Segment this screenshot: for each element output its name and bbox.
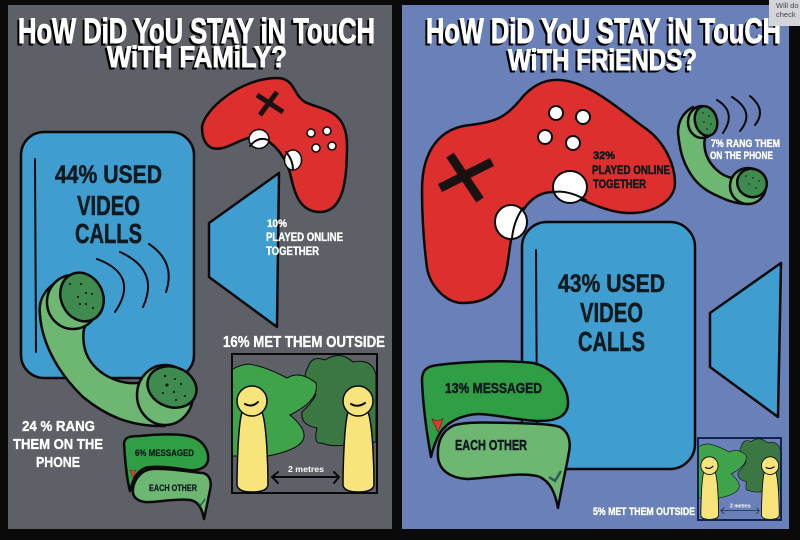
speech bubbles: messaged: 13% MESSAGED xyxy=(445,380,542,397)
scene: two metres apart xyxy=(231,354,377,493)
game controller: family xyxy=(202,78,347,212)
label: rang on the phone: 24 % RANG xyxy=(22,418,95,435)
label: used video calls: 43% USED xyxy=(558,270,665,298)
panel: family xyxy=(8,5,392,529)
scene: two metres apart: 2 metres xyxy=(730,504,751,510)
video call tablet: friends xyxy=(522,222,695,469)
camera lens: family xyxy=(209,173,279,327)
label: met them outside: 16% MET THEM OUTSIDE xyxy=(223,334,385,351)
label: used video calls: 44% USED xyxy=(55,161,162,189)
icon: telephone handset xyxy=(678,96,772,204)
label: played online: TOGETHER xyxy=(266,244,319,258)
speech bubbles: messaged xyxy=(124,434,211,519)
label: rang on the phone: 7% RANG THEM xyxy=(711,138,780,150)
label: used video calls: VIDEO xyxy=(580,297,643,328)
label: played online: 32% xyxy=(593,150,615,162)
icon: telephone handset xyxy=(40,244,202,426)
tooltip: corner note xyxy=(769,0,800,26)
label: used video calls: CALLS xyxy=(578,326,645,357)
label: rang on the phone: PHONE xyxy=(36,454,80,471)
game controller: friends xyxy=(422,80,675,303)
label: played online: 10% xyxy=(267,218,287,230)
label: played online xyxy=(592,150,670,191)
heading: family xyxy=(18,12,375,74)
scene: two metres apart: 2 metres xyxy=(288,464,324,474)
heading: friends xyxy=(426,12,781,77)
label: rang on the phone: THEM ON THE xyxy=(13,436,103,453)
camera lens: friends xyxy=(710,263,781,417)
label: used video calls xyxy=(558,270,665,357)
label: used video calls xyxy=(55,161,162,249)
label: used video calls: CALLS xyxy=(75,218,142,249)
tooltip: corner note: Will do xyxy=(776,1,799,10)
speech bubbles: messaged xyxy=(422,361,570,508)
heading: friends: WiTH FRiENDS? xyxy=(508,44,697,77)
heading: family: HoW DiD YoU STAY iN TouCH xyxy=(18,12,375,51)
speech bubbles: messaged: EACH OTHER xyxy=(455,437,527,454)
label: rang on the phone: ON THE PHONE xyxy=(710,150,773,162)
label: played online: TOGETHER xyxy=(593,177,646,191)
label: rang on the phone xyxy=(13,418,103,471)
scene: two metres apart xyxy=(697,438,781,520)
label: rang on the phone xyxy=(710,138,780,162)
label: met them outside: 5% MET THEM OUTSIDE xyxy=(593,506,695,518)
heading: family: WiTH FAMiLY? xyxy=(107,41,287,74)
panel: friends xyxy=(402,5,789,529)
speech bubbles: messaged: EACH OTHER xyxy=(149,483,197,494)
label: played online: PLAYED ONLINE xyxy=(592,163,670,177)
label: played online xyxy=(266,218,343,258)
label: played online: PLAYED ONLINE xyxy=(266,230,343,244)
video call tablet: family xyxy=(21,132,194,378)
label: used video calls: VIDEO xyxy=(77,190,140,221)
tooltip: corner note: check xyxy=(776,10,796,19)
speech bubbles: messaged: 6% MESSAGED xyxy=(135,448,194,459)
